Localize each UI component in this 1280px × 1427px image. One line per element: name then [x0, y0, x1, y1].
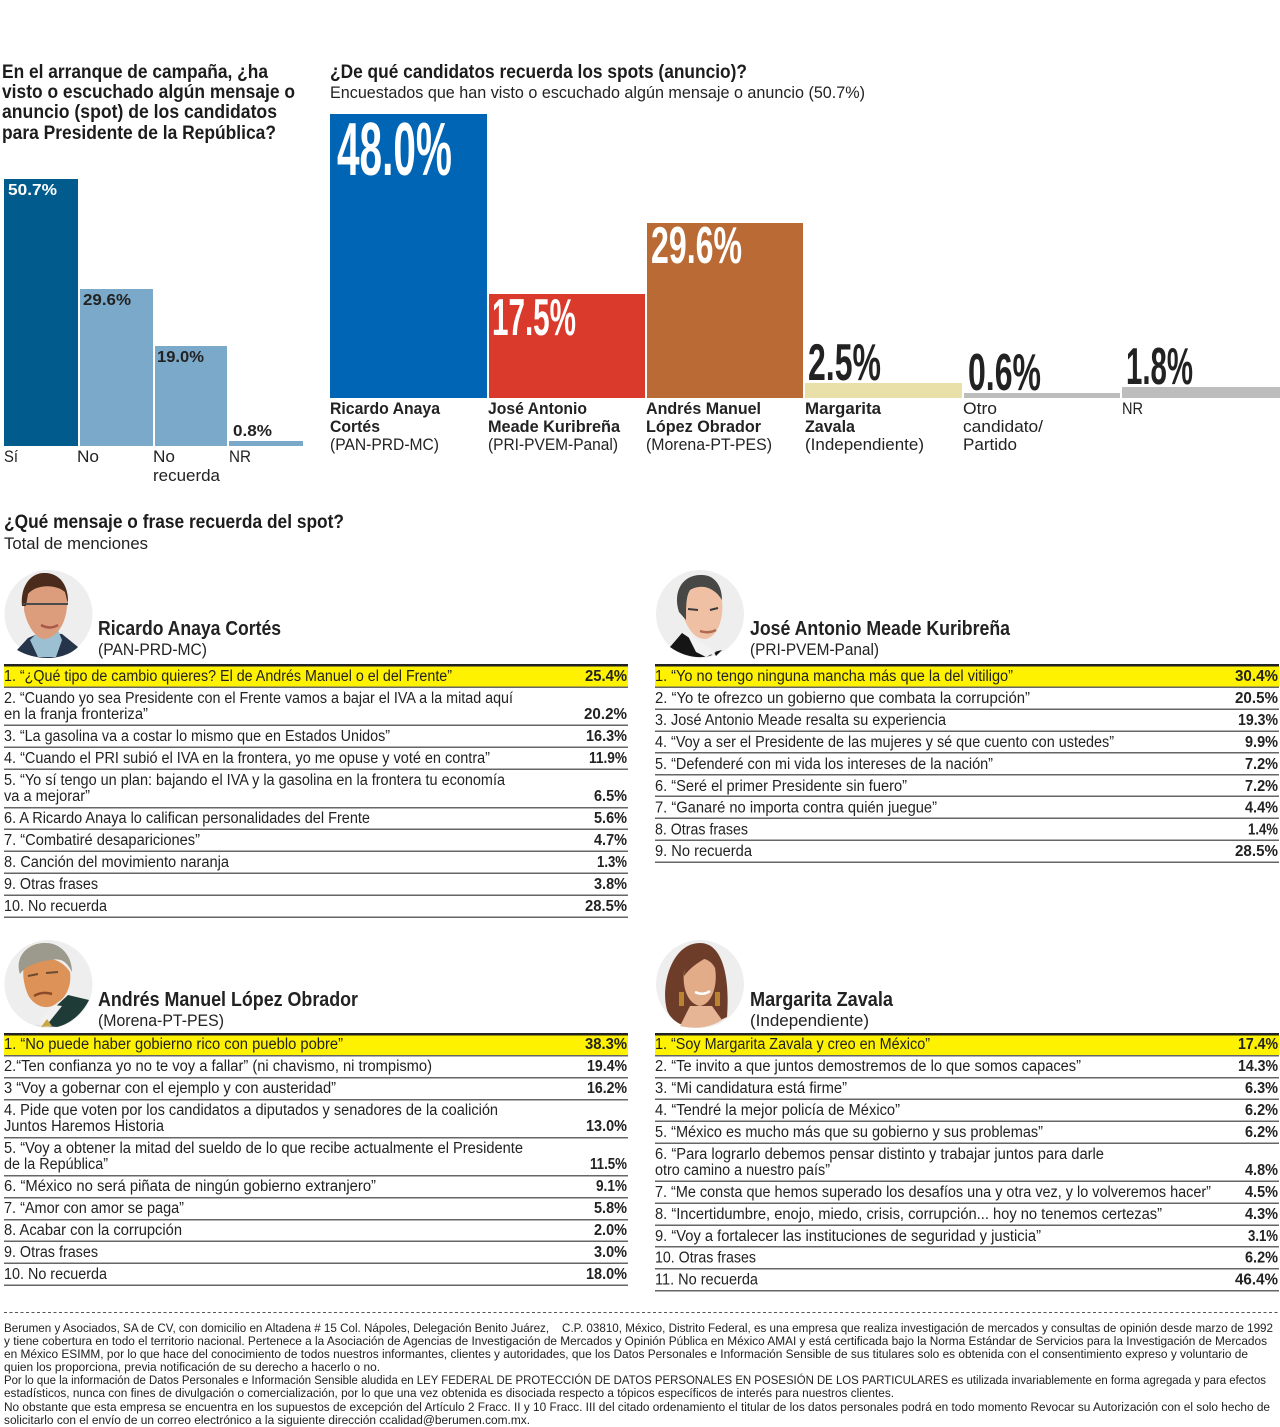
- table of phrases: 8. Canción del movimiento naranja: [4, 854, 229, 871]
- table of phrases: 30.4%: [1235, 668, 1278, 685]
- candidate bar labels: Cortés: [330, 417, 380, 436]
- table of phrases: 6.5%: [594, 788, 627, 805]
- table of phrases: 7. “Me consta que hemos superado los desafíos una y otra vez, y lo volveremos hacer”: [655, 1184, 1211, 1201]
- table of phrases: 13.0%: [586, 1118, 627, 1135]
- table of phrases: 4.3%: [1245, 1206, 1278, 1223]
- right chart heading: ¿De qué candidatos recuerda los spots (anuncio)?: [330, 61, 747, 83]
- candidate name: [98, 989, 358, 1030]
- candidate bar labels: López Obrador: [646, 417, 761, 436]
- candidate name: (PAN-PRD-MC): [98, 640, 207, 659]
- candidate bar labels: Zavala: [805, 417, 856, 436]
- bar chart: seen or heard a spot: recuerda: [153, 466, 221, 485]
- candidate bar labels: Ricardo Anaya: [330, 399, 440, 418]
- table of phrases: 9. “Voy a fortalecer las instituciones de seguridad y justicia”: [655, 1228, 1041, 1245]
- bar chart: seen or heard a spot: 19.0%: [157, 349, 204, 366]
- table of phrases: 4.4%: [1245, 800, 1278, 816]
- table of phrases: 25.4%: [585, 668, 627, 685]
- table of phrases: 4.7%: [594, 832, 627, 849]
- table of phrases: 8. Otras frases: [655, 822, 748, 838]
- table of phrases: 1. “Yo no tengo ninguna mancha más que la del vitiligo”: [655, 668, 1013, 685]
- bar chart: seen or heard a spot: 50.7%: [8, 182, 57, 199]
- table of phrases: 16.3%: [586, 728, 627, 745]
- table of phrases: 9.1%: [596, 1178, 627, 1195]
- table of phrases: va a mejorar”: [4, 788, 90, 805]
- table of phrases: 6.2%: [1245, 1250, 1278, 1266]
- candidate bar labels: candidato/: [963, 417, 1043, 436]
- panel: campaign message recall: [2, 61, 303, 485]
- table of phrases: Juntos Haremos Historia: [4, 1118, 164, 1135]
- table of phrases: [4, 664, 628, 918]
- icon: portrait López Obrador: [4, 940, 92, 1028]
- panel: candidates recalled: [330, 61, 1280, 454]
- table of phrases: 2.0%: [594, 1222, 627, 1239]
- table of phrases: 4. “Tendré la mejor policía de México”: [655, 1102, 900, 1119]
- right chart heading: Encuestados que han visto o escuchado algún mensaje o anuncio (50.7%): [330, 83, 865, 102]
- table of phrases: 28.5%: [1235, 843, 1278, 860]
- candidate bar labels: (PRI-PVEM-Panal): [488, 435, 618, 454]
- bar chart: seen or heard a spot: 0.8%: [233, 423, 272, 440]
- table of phrases: 4. “Cuando el PRI subió el IVA en la frontera, yo me opuse y voté en contra”: [4, 750, 490, 767]
- footer: methodology and privacy notice: y tiene cobertura en todo el territorio nacional. Pertenece a la Asociación de Agencias de Investigación de Mercados y Opinión Pública en México AMAI y está certificada bajo la Norma Estándar de Servicios para la Investigación de Mercados: [4, 1334, 1267, 1348]
- table of phrases: 4.8%: [1245, 1162, 1278, 1179]
- left chart heading: para Presidente de la República?: [2, 122, 276, 144]
- section heading: message recall: [4, 511, 344, 553]
- bar chart: seen or heard a spot: [4, 179, 303, 485]
- table of phrases: 20.5%: [1235, 690, 1278, 707]
- panel: Margarita Zavala: [655, 940, 1279, 1292]
- bar chart: candidates: 1.8%: [1126, 338, 1193, 396]
- table of phrases: 10. Otras frases: [655, 1250, 756, 1266]
- table of phrases: 18.0%: [586, 1266, 627, 1283]
- table of phrases: otro camino a nuestro país”: [655, 1162, 830, 1179]
- table of phrases: 11.5%: [590, 1156, 627, 1173]
- footer: methodology and privacy notice: en México ESIMM, por lo que hace del conocimiento de todos nuestros informantes, clientes y autoridades, que los Datos Personales e Información Sensible de sus titulares solo es obtenida con el consentimiento expreso y voluntario de: [4, 1347, 1248, 1361]
- table of phrases: 7. “Ganaré no importa contra quién juegue”: [655, 800, 937, 816]
- bar chart: candidates: 48.0%: [337, 107, 452, 191]
- table of phrases: 7. “Amor con amor se paga”: [4, 1200, 184, 1217]
- bar chart: candidates: [330, 107, 1280, 402]
- candidate bar labels: (PAN-PRD-MC): [330, 435, 439, 454]
- panel: José Antonio Meade: [655, 570, 1279, 863]
- table of phrases: 2. “Te invito a que juntos demostremos de lo que somos capaces”: [655, 1058, 1081, 1075]
- icon: portrait Anaya: [4, 570, 92, 658]
- table of phrases: 5.6%: [594, 810, 627, 827]
- bar chart: candidates: 2.5%: [808, 334, 881, 392]
- table of phrases: 7.2%: [1245, 756, 1278, 773]
- table of phrases: 5. “Yo sí tengo un plan: bajando el IVA y la gasolina en la frontera tu economía: [4, 772, 505, 789]
- table of phrases: 8. Acabar con la corrupción: [4, 1222, 182, 1239]
- table of phrases: 11.9%: [589, 750, 627, 767]
- table of phrases: 9.9%: [1245, 734, 1278, 751]
- section heading: message recall: ¿Qué mensaje o frase recuerda del spot?: [4, 511, 344, 533]
- table of phrases: 2.“Ten confianza yo no te voy a fallar” (ni chavismo, ni trompismo): [4, 1058, 432, 1075]
- candidate bar labels: Otro: [963, 399, 997, 418]
- table of phrases: [4, 1033, 628, 1286]
- table of phrases: 3. José Antonio Meade resalta su experiencia: [655, 712, 946, 729]
- table of phrases: 3 “Voy a gobernar con el ejemplo y con austeridad”: [4, 1080, 336, 1097]
- table of phrases: 4.5%: [1245, 1184, 1278, 1201]
- bar chart: candidates: 29.6%: [651, 217, 742, 275]
- table of phrases: 9. No recuerda: [655, 843, 752, 860]
- candidate name: Ricardo Anaya Cortés: [98, 618, 281, 640]
- table of phrases: 1. “No puede haber gobierno rico con pueblo pobre”: [4, 1036, 343, 1053]
- table of phrases: 8. “Incertidumbre, enojo, miedo, crisis, corrupción... hoy no tenemos certezas”: [655, 1206, 1162, 1223]
- section heading: message recall: Total de menciones: [4, 534, 148, 553]
- table of phrases: 28.5%: [585, 898, 627, 915]
- table of phrases: 19.4%: [587, 1058, 627, 1075]
- table of phrases: 1. “Soy Margarita Zavala y creo en México”: [655, 1036, 930, 1053]
- table of phrases: 3. “Mi candidatura está firme”: [655, 1080, 847, 1097]
- table of phrases: 46.4%: [1235, 1272, 1278, 1288]
- table of phrases: 38.3%: [585, 1036, 627, 1053]
- footer: methodology and privacy notice: estadísticos, nunca con fines de divulgación o comercialización, por lo que una vez obtenida es disociada respecto a tópicos específicos de interés para nuestros clientes.: [4, 1386, 894, 1400]
- table of phrases: 2. “Yo te ofrezco un gobierno que combata la corrupción”: [655, 690, 1030, 707]
- bar chart: seen or heard a spot: Sí: [4, 447, 18, 466]
- left chart heading: visto o escuchado algún mensaje o: [2, 81, 295, 103]
- candidate name: Margarita Zavala: [750, 989, 894, 1011]
- table of phrases: 3.0%: [594, 1244, 627, 1261]
- candidate bar labels: Meade Kuribreña: [488, 417, 621, 436]
- table of phrases: 4. “Voy a ser el Presidente de las mujeres y sé que cuento con ustedes”: [655, 734, 1114, 751]
- bar chart: seen or heard a spot: No: [153, 447, 175, 466]
- table of phrases: 5. “Voy a obtener la mitad del sueldo de lo que recibe actualmente el Presidente: [4, 1140, 523, 1157]
- table of phrases: de la República”: [4, 1156, 108, 1173]
- left chart heading: [2, 61, 295, 144]
- candidate name: José Antonio Meade Kuribreña: [750, 618, 1011, 640]
- bar chart: seen or heard a spot: 29.6%: [83, 292, 131, 309]
- table of phrases: 9. Otras frases: [4, 876, 98, 893]
- table of phrases: 2. “Cuando yo sea Presidente con el Frente vamos a bajar el IVA a la mitad aquí: [4, 690, 514, 707]
- icon: portrait Meade: [656, 570, 744, 658]
- right chart heading: [330, 61, 865, 102]
- table of phrases: 3. “La gasolina va a costar lo mismo que en Estados Unidos”: [4, 728, 390, 745]
- table of phrases: 6. A Ricardo Anaya lo califican personalidades del Frente: [4, 810, 370, 827]
- footer: methodology and privacy notice: solicitarlo con el envío de un correo electrónico a la siguiente dirección ccalidad@berumen.com.mx.: [4, 1413, 530, 1427]
- table of phrases: 16.2%: [587, 1080, 627, 1097]
- table of phrases: 5. “Defenderé con mi vida los intereses de la nación”: [655, 756, 993, 773]
- table of phrases: [655, 664, 1279, 863]
- table of phrases: 6.3%: [1245, 1080, 1278, 1097]
- table of phrases: 5.8%: [594, 1200, 627, 1217]
- candidate name: [750, 989, 894, 1030]
- footer: methodology and privacy notice: No obstante que esta empresa se encuentra en los supuestos de excepción del Artículo 2 Fracc. II y 10 Fracc. III del citado ordenamiento el titular de los datos personales podrá en todo momento Revocar su Autorización con el solo hecho de: [4, 1400, 1270, 1414]
- table of phrases: 11. No recuerda: [655, 1272, 758, 1288]
- table of phrases: 6. “México no será piñata de ningún gobierno extranjero”: [4, 1178, 376, 1195]
- left chart heading: anuncio (spot) de los candidatos: [2, 101, 277, 123]
- table of phrases: en la franja fronteriza”: [4, 706, 148, 723]
- panel: Ricardo Anaya: [4, 570, 628, 918]
- table of phrases: 9. Otras frases: [4, 1244, 98, 1261]
- table of phrases: 10. No recuerda: [4, 898, 107, 915]
- bar chart: candidates: 0.6%: [968, 344, 1041, 402]
- icon: portrait Zavala: [656, 940, 744, 1028]
- table of phrases: 3.8%: [594, 876, 627, 893]
- table of phrases: 1.3%: [597, 854, 627, 871]
- candidate name: (Independiente): [750, 1011, 869, 1030]
- left chart heading: En el arranque de campaña, ¿ha: [2, 61, 268, 83]
- candidate name: [750, 618, 1011, 659]
- candidate bar labels: Andrés Manuel: [646, 399, 761, 418]
- table of phrases: 20.2%: [584, 706, 627, 723]
- table of phrases: 4. Pide que voten por los candidatos a diputados y senadores de la coalición: [4, 1102, 498, 1119]
- panel: Andrés Manuel López Obrador: [4, 940, 628, 1286]
- candidate bar labels: Margarita: [805, 399, 882, 418]
- candidate name: [98, 618, 281, 659]
- bar chart: candidates: 17.5%: [492, 289, 576, 347]
- table of phrases: 6.2%: [1245, 1102, 1278, 1119]
- table of phrases: 7.2%: [1245, 778, 1278, 795]
- table of phrases: 6.2%: [1245, 1124, 1278, 1141]
- candidate name: Andrés Manuel López Obrador: [98, 989, 358, 1011]
- candidate bar labels: [330, 399, 1143, 454]
- footer: methodology and privacy notice: [4, 1321, 1273, 1427]
- table of phrases: [655, 1033, 1279, 1292]
- candidate bar labels: Partido: [963, 435, 1017, 454]
- bar chart: seen or heard a spot: No: [77, 447, 99, 466]
- candidate bar labels: (Independiente): [805, 435, 924, 454]
- table of phrases: 7. “Combatiré desapariciones”: [4, 832, 200, 849]
- candidate name: (PRI-PVEM-Panal): [750, 640, 879, 659]
- candidate bar labels: (Morena-PT-PES): [646, 435, 772, 454]
- candidate name: (Morena-PT-PES): [98, 1011, 224, 1030]
- candidate bar labels: NR: [1122, 399, 1143, 418]
- table of phrases: 6. “Seré el primer Presidente sin fuero”: [655, 778, 907, 795]
- table of phrases: 5. “México es mucho más que su gobierno y sus problemas”: [655, 1124, 1043, 1141]
- table of phrases: 10. No recuerda: [4, 1266, 107, 1283]
- candidate bar labels: José Antonio: [488, 399, 587, 418]
- table of phrases: 1. “¿Qué tipo de cambio quieres? El de Andrés Manuel o el del Frente”: [4, 668, 452, 685]
- footer: methodology and privacy notice: quien los proporciona, previa notificación de su derecho a hacerlo o no.: [4, 1360, 380, 1374]
- table of phrases: 6. “Para lograrlo debemos pensar distinto y trabajar juntos para darle: [655, 1146, 1104, 1163]
- bar chart: seen or heard a spot: NR: [229, 447, 251, 466]
